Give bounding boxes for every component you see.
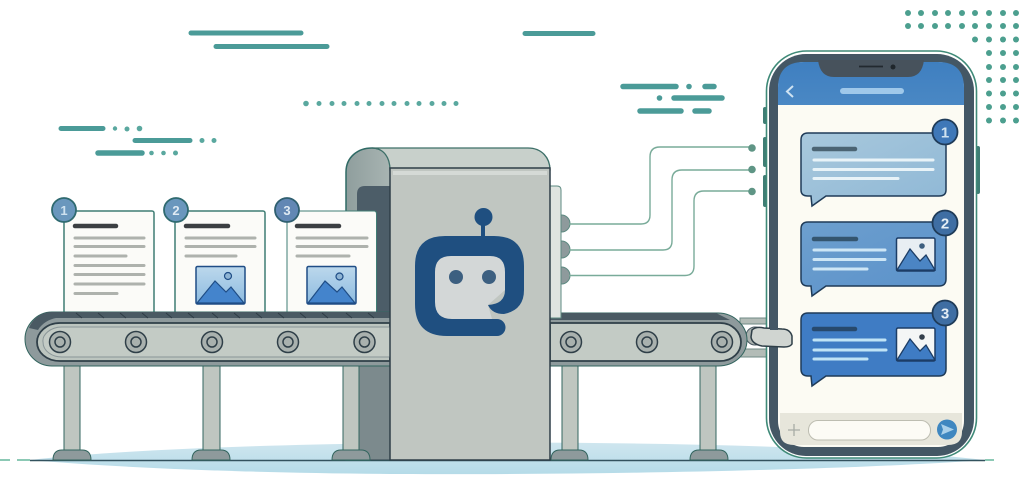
chat bubble 1 bbox=[801, 133, 946, 206]
conveyor extension behind phone bbox=[740, 318, 772, 357]
badge: document 2 bbox=[164, 198, 188, 222]
input bar bbox=[780, 413, 962, 445]
phone notch bbox=[818, 60, 924, 77]
decorative dashes: top bbox=[191, 33, 593, 46]
badge: document 3 bbox=[275, 198, 299, 222]
robot logo bbox=[415, 208, 524, 336]
icon: picture bbox=[896, 328, 935, 361]
phone frame bbox=[766, 51, 976, 458]
badge: bubble 2 bbox=[932, 210, 958, 236]
ground shadow bbox=[0, 443, 994, 474]
back arrow bbox=[787, 86, 793, 97]
phone bbox=[763, 51, 980, 458]
phone screen bbox=[778, 62, 964, 447]
conveyor clip over phone edge bbox=[751, 322, 792, 347]
decorative dot grid bbox=[905, 10, 1019, 124]
badge: bubble 2: 2 bbox=[941, 216, 949, 232]
machine side panel and output ports bbox=[550, 186, 570, 318]
chat bubble 2 bbox=[801, 222, 946, 296]
document 3 bbox=[287, 211, 376, 314]
connector lines bbox=[569, 144, 756, 276]
badge: bubble 1 bbox=[932, 120, 958, 144]
phone header bbox=[778, 62, 964, 105]
decorative dashes: left bbox=[61, 126, 216, 156]
left conveyor legs bbox=[53, 366, 370, 460]
badge: bubble 3 bbox=[932, 300, 958, 326]
document 2 bbox=[175, 211, 265, 314]
right conveyor belt bbox=[550, 313, 747, 366]
phone side buttons bbox=[763, 107, 980, 207]
badge: bubble 3: 3 bbox=[941, 306, 949, 322]
icon: picture bbox=[896, 238, 935, 271]
icon: picture bbox=[196, 266, 245, 304]
right conveyor legs bbox=[551, 366, 728, 460]
left conveyor belt bbox=[25, 312, 390, 366]
machine back and tunnel bbox=[346, 148, 392, 460]
machine body bbox=[372, 148, 550, 460]
badge: document 2: 2 bbox=[172, 203, 180, 218]
decorative dashes: right bbox=[623, 84, 722, 111]
chat bubble 3 bbox=[801, 313, 946, 386]
icon: picture bbox=[307, 266, 356, 304]
document 1 bbox=[64, 211, 154, 314]
header title pill bbox=[840, 88, 904, 94]
badge: bubble 1: 1 bbox=[941, 124, 949, 142]
badge: document 3: 3 bbox=[283, 203, 291, 218]
decorative dotted line bbox=[303, 101, 458, 106]
badge: document 1: 1 bbox=[60, 203, 68, 218]
badge: document 1 bbox=[52, 198, 76, 222]
